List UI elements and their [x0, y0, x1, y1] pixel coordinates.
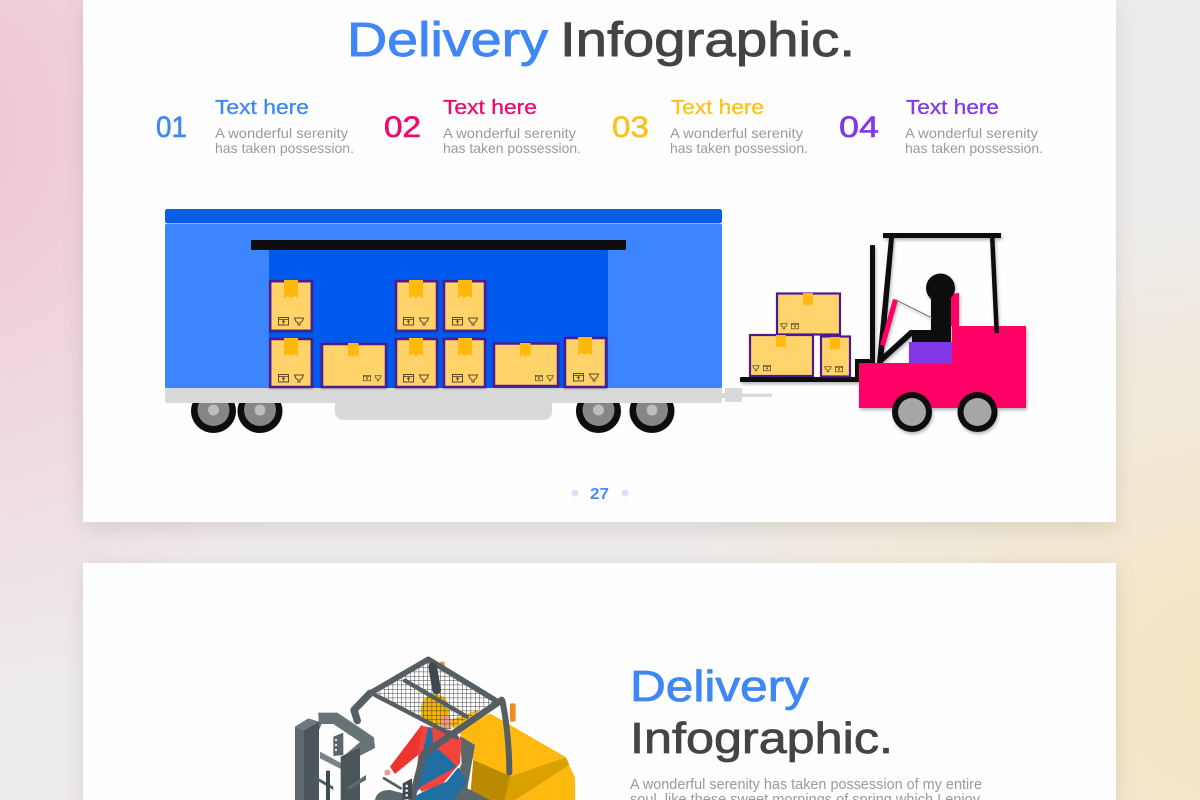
box	[270, 280, 312, 331]
box	[444, 280, 485, 331]
step 04: 04	[839, 111, 879, 144]
box	[396, 338, 437, 387]
box	[821, 336, 850, 376]
box	[444, 338, 485, 387]
page number	[572, 486, 628, 503]
curtain rail	[251, 240, 626, 250]
title	[347, 14, 855, 67]
trailer roof	[165, 209, 722, 224]
step 03: Text here	[671, 97, 764, 119]
heading: Delivery	[630, 662, 809, 711]
title: Delivery	[347, 14, 548, 67]
step 04: A wonderful serenity	[905, 125, 1038, 141]
yellow body	[458, 713, 575, 800]
pallet boxes	[750, 293, 850, 376]
box	[565, 337, 606, 387]
box	[750, 335, 813, 376]
mast	[295, 713, 375, 800]
trailer wheels	[191, 389, 674, 433]
helmet	[421, 694, 449, 726]
steering wheel and dash	[375, 778, 412, 800]
paragraph: A wonderful serenity has taken possession of my entire	[630, 777, 982, 793]
overalls lower	[408, 767, 467, 800]
step 03: A wonderful serenity	[670, 125, 803, 141]
box	[494, 343, 558, 386]
illustration: isometric forklift	[295, 659, 575, 800]
overhead guard	[877, 233, 1001, 363]
step 04: Text here	[906, 97, 999, 119]
step 04: has taken possession.	[905, 140, 1043, 156]
seat	[909, 342, 952, 364]
forklift wheels	[892, 392, 998, 432]
overalls	[417, 727, 457, 792]
step 01: A wonderful serenity	[215, 125, 348, 141]
steering line	[896, 300, 932, 318]
step 02: A wonderful serenity	[443, 125, 576, 141]
step 02	[384, 97, 581, 156]
box	[396, 280, 437, 331]
step 03: has taken possession.	[670, 140, 808, 156]
box	[322, 343, 386, 387]
paragraph	[630, 777, 982, 800]
steering column	[880, 299, 898, 346]
panel: forklift photo slide	[83, 563, 1116, 800]
step 01: Text here	[215, 97, 309, 119]
illustration: red forklift	[740, 233, 1026, 432]
hand	[384, 770, 390, 776]
body shade	[470, 757, 569, 800]
mesh	[377, 662, 493, 733]
heading: Infographic.	[630, 714, 893, 763]
step 01: has taken possession.	[215, 140, 354, 156]
orange lights	[439, 662, 516, 722]
step 02: 02	[384, 111, 421, 144]
panel: truck and forklift slide	[83, 0, 1116, 522]
seat	[423, 736, 490, 800]
step 01: 01	[156, 111, 187, 144]
face	[440, 715, 452, 730]
forklift body	[859, 293, 1026, 408]
hair	[448, 709, 480, 728]
driver	[877, 274, 955, 363]
step 01	[156, 97, 354, 156]
overhead guard	[354, 659, 509, 800]
step 04	[839, 97, 1043, 156]
page number: 27	[590, 486, 609, 503]
torso	[415, 726, 462, 792]
step 03	[612, 97, 808, 156]
step 02: Text here	[443, 97, 537, 119]
mast and forks	[740, 245, 875, 382]
trailer bed	[165, 387, 772, 420]
heading	[630, 662, 893, 763]
arm	[390, 725, 430, 774]
box	[777, 293, 840, 334]
title: Infographic.	[560, 14, 855, 67]
illustration: truck trailer	[165, 209, 772, 433]
cargo boxes	[270, 280, 606, 387]
box	[270, 338, 312, 387]
step 03: 03	[612, 111, 649, 144]
trailer opening	[269, 250, 608, 388]
trailer body	[165, 224, 722, 388]
driver	[384, 694, 480, 800]
step 02: has taken possession.	[443, 140, 581, 156]
